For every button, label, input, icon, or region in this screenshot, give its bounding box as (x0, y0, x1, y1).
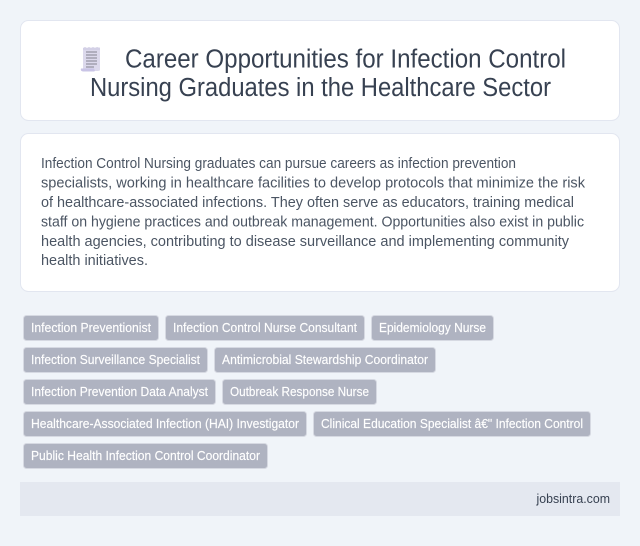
tag: Public Health Infection Control Coordinator (24, 444, 268, 468)
tag: Infection Control Nurse Consultant (166, 316, 364, 340)
text block: description: Infection Control Nursing graduates can pursue careers as infection prevention (41, 156, 516, 172)
text block: description: of healthcare-associated infections. They often serve as educators, training medical (41, 195, 574, 211)
tag: Public Health Infection Control Coordinator: Public Health Infection Control Coordinator (31, 448, 261, 463)
tag: Infection Prevention Data Analyst: Infection Prevention Data Analyst (31, 384, 208, 399)
tag: Infection Surveillance Specialist (24, 348, 208, 372)
tag: Infection Control Nurse Consultant: Infection Control Nurse Consultant (173, 320, 357, 335)
panel: description (20, 134, 620, 292)
tag: Epidemiology Nurse (372, 316, 494, 340)
tag list (24, 316, 590, 468)
tag: Outbreak Response Nurse: Outbreak Response Nurse (230, 384, 369, 399)
tag: Clinical Education Specialist (314, 412, 590, 436)
tag: Clinical Education Specialist: Clinical Education Specialist â€" Infection Control (321, 416, 583, 431)
title: Career Opportunities for Infection Control (125, 46, 566, 74)
tag: Epidemiology Nurse: Epidemiology Nurse (379, 320, 486, 335)
tag: Healthcare-Associated Infection (HAI) Investigator (24, 412, 306, 436)
text block: description: staff on hygiene practices and outbreak management. Opportunities also exist in public (41, 214, 585, 230)
tag: Infection Preventionist: Infection Preventionist (31, 320, 151, 335)
panel: title card (20, 20, 620, 120)
tag: Antimicrobial Stewardship Coordinator: Antimicrobial Stewardship Coordinator (222, 352, 429, 367)
tag: Infection Prevention Data Analyst (24, 380, 216, 404)
tag: Healthcare-Associated Infection (HAI) Investigator: Healthcare-Associated Infection (HAI) Investigator (31, 416, 300, 431)
text block: description: specialists, working in healthcare facilities to develop protocols that minimize the risk (41, 176, 586, 192)
tag: Infection Preventionist (24, 316, 158, 340)
tag: Antimicrobial Stewardship Coordinator (214, 348, 436, 372)
tag: Outbreak Response Nurse (222, 380, 376, 404)
tag: Infection Surveillance Specialist: Infection Surveillance Specialist (31, 352, 200, 367)
footer source text: jobsintra.com (536, 491, 610, 506)
text block: description (41, 156, 586, 269)
text block: description: health initiatives. (41, 253, 148, 269)
icon: document scroll (81, 47, 100, 72)
title (90, 46, 566, 102)
title: Nursing Graduates in the Healthcare Sector (90, 74, 551, 102)
text block: description: health agencies, contributing to disease surveillance and implementing community (41, 234, 570, 250)
footer (20, 482, 620, 516)
